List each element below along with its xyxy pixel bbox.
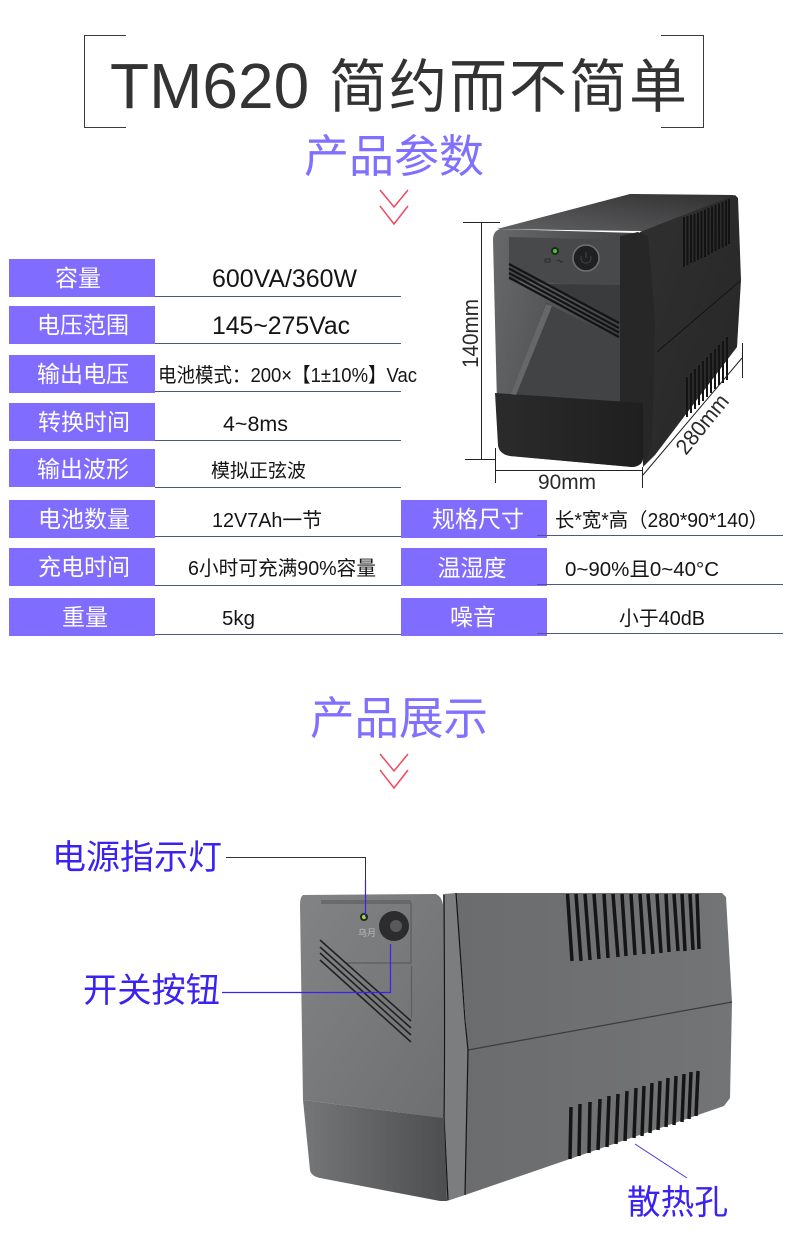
row: weight <box>9 598 401 636</box>
power button <box>379 911 409 941</box>
row: capacity: 600VA/360W <box>212 265 357 293</box>
row: transfer time <box>9 403 401 441</box>
callout: power switch: 开关按钮 <box>83 972 220 1010</box>
row: transfer time: 4~8ms <box>223 413 288 436</box>
row: transfer time: 转换时间 <box>38 409 130 435</box>
front corner strip <box>443 893 468 1201</box>
icon: chevrons down <box>380 190 408 224</box>
title frame <box>84 36 704 128</box>
row: noise: 噪音 <box>450 604 496 630</box>
heading: product display: 产品展示 <box>310 693 488 744</box>
row: noise <box>401 598 783 636</box>
row: output voltage: 输出电压 <box>37 361 129 387</box>
callout: power indicator <box>52 839 366 917</box>
power LED <box>360 913 368 921</box>
row: battery: 12V7Ah一节 <box>212 509 322 532</box>
diagonal grill <box>509 264 619 337</box>
callout: power switch <box>83 944 390 1010</box>
row: dimensions: 长*宽*高（280*90*140） <box>555 509 768 532</box>
row: weight: 重量 <box>62 604 108 630</box>
LED marks <box>545 259 563 262</box>
row: dimensions: 规格尺寸 <box>432 506 524 532</box>
front lower dark area <box>511 303 622 405</box>
row: dimensions <box>401 500 783 538</box>
product image: UPS with dimensions <box>458 194 742 494</box>
lower panel <box>545 284 620 322</box>
row: voltage range: 电压范围 <box>37 312 129 338</box>
row: charge time: 6小时可充满90%容量 <box>188 557 376 580</box>
row: capacity <box>9 259 401 297</box>
row: temperature humidity: 0~90%且0~40°C <box>565 559 719 581</box>
dimension: width <box>495 448 642 494</box>
mark under LED: 乌月 <box>358 927 376 938</box>
product photo: UPS <box>300 893 732 1201</box>
power button <box>573 245 599 271</box>
row: voltage range: 145~275Vac <box>212 312 350 340</box>
callout: power indicator: 电源指示灯 <box>52 839 222 877</box>
side vents bottom <box>570 1071 698 1159</box>
row: capacity: 容量 <box>55 265 101 291</box>
side face <box>640 195 741 467</box>
icon: chevrons down <box>380 754 408 788</box>
row: temperature humidity <box>401 548 783 586</box>
row: waveform <box>9 449 401 488</box>
panel outline <box>321 901 412 1018</box>
row: noise: 小于40dB <box>619 607 705 630</box>
front face <box>493 229 642 467</box>
title: 简约而不简单 <box>329 55 689 120</box>
row: waveform: 模拟正弦波 <box>211 460 306 482</box>
title: TM620 <box>110 50 309 122</box>
front face <box>300 894 443 1118</box>
spec table right column <box>401 500 783 636</box>
front corner strip <box>620 232 655 466</box>
row: charge time <box>9 548 401 586</box>
side vents top <box>568 894 699 961</box>
side seam <box>468 1002 732 1050</box>
dimension: depth <box>643 343 742 475</box>
diagonal grill <box>320 940 411 1042</box>
front panel recess <box>509 237 620 288</box>
side vents <box>684 199 729 417</box>
side seam <box>657 281 740 352</box>
spec table left column <box>9 259 417 636</box>
row: output voltage: 电池模式：200×【1±10%】Vac <box>158 364 417 387</box>
dimension: height: 140mm <box>458 299 483 368</box>
row: temperature humidity: 温湿度 <box>438 555 506 581</box>
dimension: height <box>458 222 500 460</box>
row: output voltage <box>9 355 417 393</box>
dimension: width: 90mm <box>538 471 596 494</box>
callout: vent holes: 散热孔 <box>627 1184 728 1222</box>
row: battery: 电池数量 <box>38 506 130 532</box>
base <box>303 1100 447 1201</box>
power LED <box>551 247 559 255</box>
corner seams <box>444 893 468 1200</box>
base <box>495 393 643 467</box>
row: voltage range <box>9 306 401 344</box>
top face <box>497 194 737 232</box>
callout: vent holes <box>627 1144 728 1222</box>
heading: product parameters: 产品参数 <box>304 131 484 182</box>
diagonal facet <box>511 304 552 395</box>
side panel <box>456 893 732 1195</box>
row: weight: 5kg <box>222 608 255 630</box>
row: battery <box>9 500 401 538</box>
dimension: depth: 280mm <box>670 389 734 459</box>
row: waveform: 输出波形 <box>37 456 129 482</box>
row: charge time: 充电时间 <box>38 554 130 580</box>
